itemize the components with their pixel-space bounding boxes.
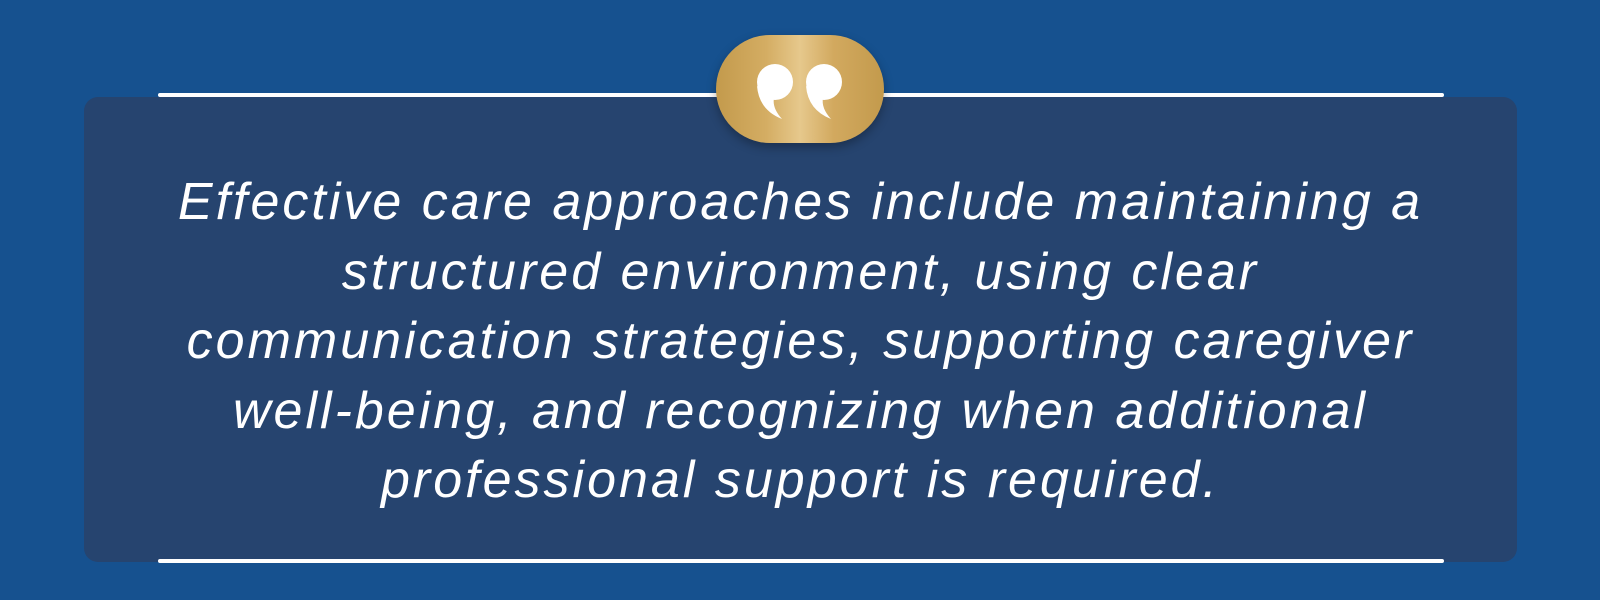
panel: quote box xyxy=(84,97,1517,562)
quote text: Effective care approaches include maintaining a xyxy=(178,173,1423,231)
icon: quote badge xyxy=(716,35,884,143)
quote text: structured environment, using clear xyxy=(342,242,1259,300)
quote text xyxy=(178,173,1423,509)
top line xyxy=(158,93,1444,97)
quote text: professional support is required. xyxy=(381,451,1220,509)
quote text: well-being, and recognizing when additional xyxy=(233,382,1368,440)
bottom line xyxy=(158,559,1444,563)
quote text: communication strategies, supporting caregiver xyxy=(187,312,1414,370)
